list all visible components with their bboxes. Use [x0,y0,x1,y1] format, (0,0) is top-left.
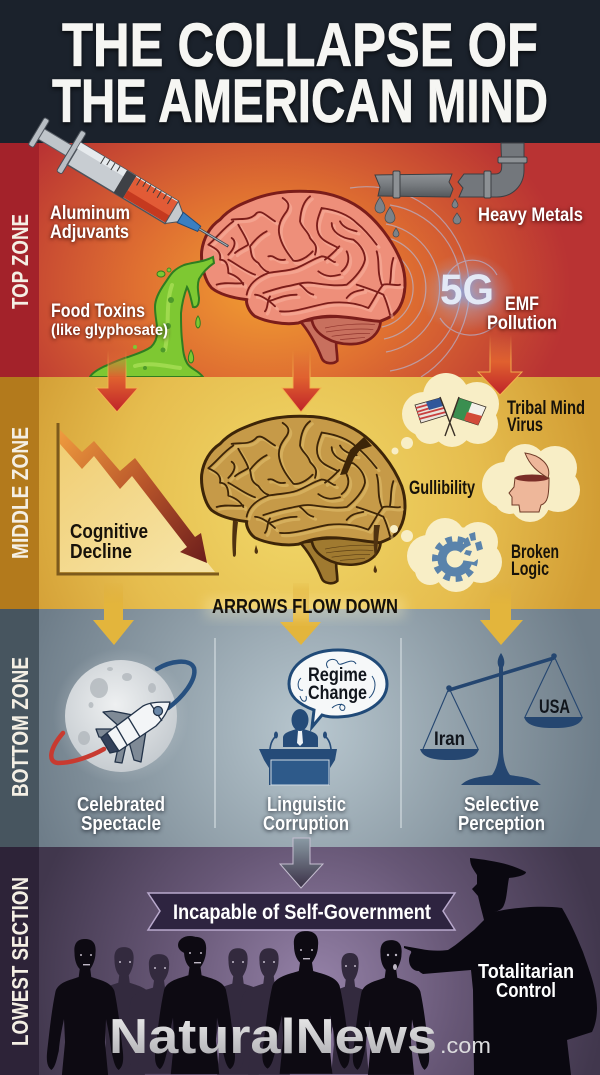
text: cognitive decline [70,521,148,563]
logo: naturalnews.com: .com [440,1033,491,1058]
text: totalitarian control: Control [496,980,556,1002]
text: food toxins [51,301,168,339]
icon: syringe [24,110,241,267]
zombie faces [80,949,397,970]
text: EMF pollution [487,294,557,334]
text: celebrated spectacle: Celebrated [77,794,165,816]
text: selective perception: Perception [458,813,545,835]
icon: scales [420,653,583,785]
label: lowest section: LOWEST SECTION [7,877,33,1046]
text: linguistic corruption: Corruption [263,813,349,835]
arrow: yellow right [480,583,523,645]
text: broken logic [511,542,559,580]
text: broken logic: Broken [511,542,559,563]
text: EMF pollution: Pollution [487,313,557,334]
chart: cognitive decline [58,423,219,574]
icon: decayed brain [202,416,405,583]
text: linguistic corruption: Linguistic [267,794,346,816]
arrow: yellow centre [280,583,321,645]
label: bottom zone: BOTTOM ZONE [7,657,33,797]
title [52,11,548,135]
icon: 5G glow: 5G [440,266,494,314]
text: selective perception: Selective [464,794,539,816]
panel: top zone [0,110,600,377]
text: totalitarian control [478,961,574,1002]
text: totalitarian control: Totalitarian [478,961,574,983]
text: celebrated spectacle: Spectacle [81,813,161,835]
text: tribal mind virus [507,398,585,436]
panel: lowest section [0,838,600,1075]
text: aluminum adjuvants [50,203,130,243]
text: arrows flow down: ARROWS FLOW DOWN [212,596,398,618]
silhouette: officer [404,858,597,1075]
callout: regime change bubble: Regime [308,665,367,686]
icon: open head cloud [482,444,580,522]
icon: pink brain [202,191,405,363]
crowd: background zombies [89,947,381,1075]
callout: regime change bubble [289,650,387,727]
label: middle zone: MIDDLE ZONE [7,427,33,559]
text: linguistic corruption [263,794,349,835]
text: usa label: USA [539,697,570,718]
text: tribal mind virus: Virus [507,415,543,436]
callout: thought clouds [390,373,580,592]
text: cognitive decline: Cognitive [70,521,148,543]
banner: incapable of self-government [148,893,455,930]
icon: podium speaker [259,709,337,785]
text: aluminum adjuvants: Aluminum [50,203,130,224]
icon: broken gear cloud [390,518,502,592]
text: gullibility: Gullibility [409,478,475,499]
arrow: yellow left [93,583,134,645]
text: food toxins: Food Toxins [51,301,145,322]
icon: radio waves [350,187,500,377]
label: top zone: TOP ZONE [7,214,33,309]
callout: regime change bubble: Change [308,683,367,704]
text: cognitive decline: Decline [70,541,132,563]
text: aluminum adjuvants: Adjuvants [50,222,129,243]
panel: middle zone [0,373,600,609]
icon: tribal flags cloud [392,373,499,454]
text: selective perception [458,794,545,835]
arrow: purple down [280,838,323,888]
text: food toxins: (like glyphosate) [51,322,168,339]
text: heavy metals: Heavy Metals [478,205,583,226]
icon: broken pipe [375,143,527,237]
icon: green slime [90,257,214,377]
text: broken logic: Logic [511,559,549,580]
text: iran label: Iran [434,729,465,750]
arrow: red right [478,335,522,395]
crowd: foreground zombies [47,931,429,1075]
arrow: red centre [282,350,321,412]
text: celebrated spectacle [77,794,165,835]
arrow: red left [96,350,138,412]
logo: naturalnews.com: NaturalNews [109,1010,437,1064]
icon: moon and rocket [51,648,194,784]
text: EMF pollution: EMF [505,294,539,315]
banner: incapable of self-government: Incapable of Self-Government [173,901,431,924]
panel: bottom zone [0,609,600,847]
header band [0,0,600,143]
icon: 5G glow [419,253,515,333]
